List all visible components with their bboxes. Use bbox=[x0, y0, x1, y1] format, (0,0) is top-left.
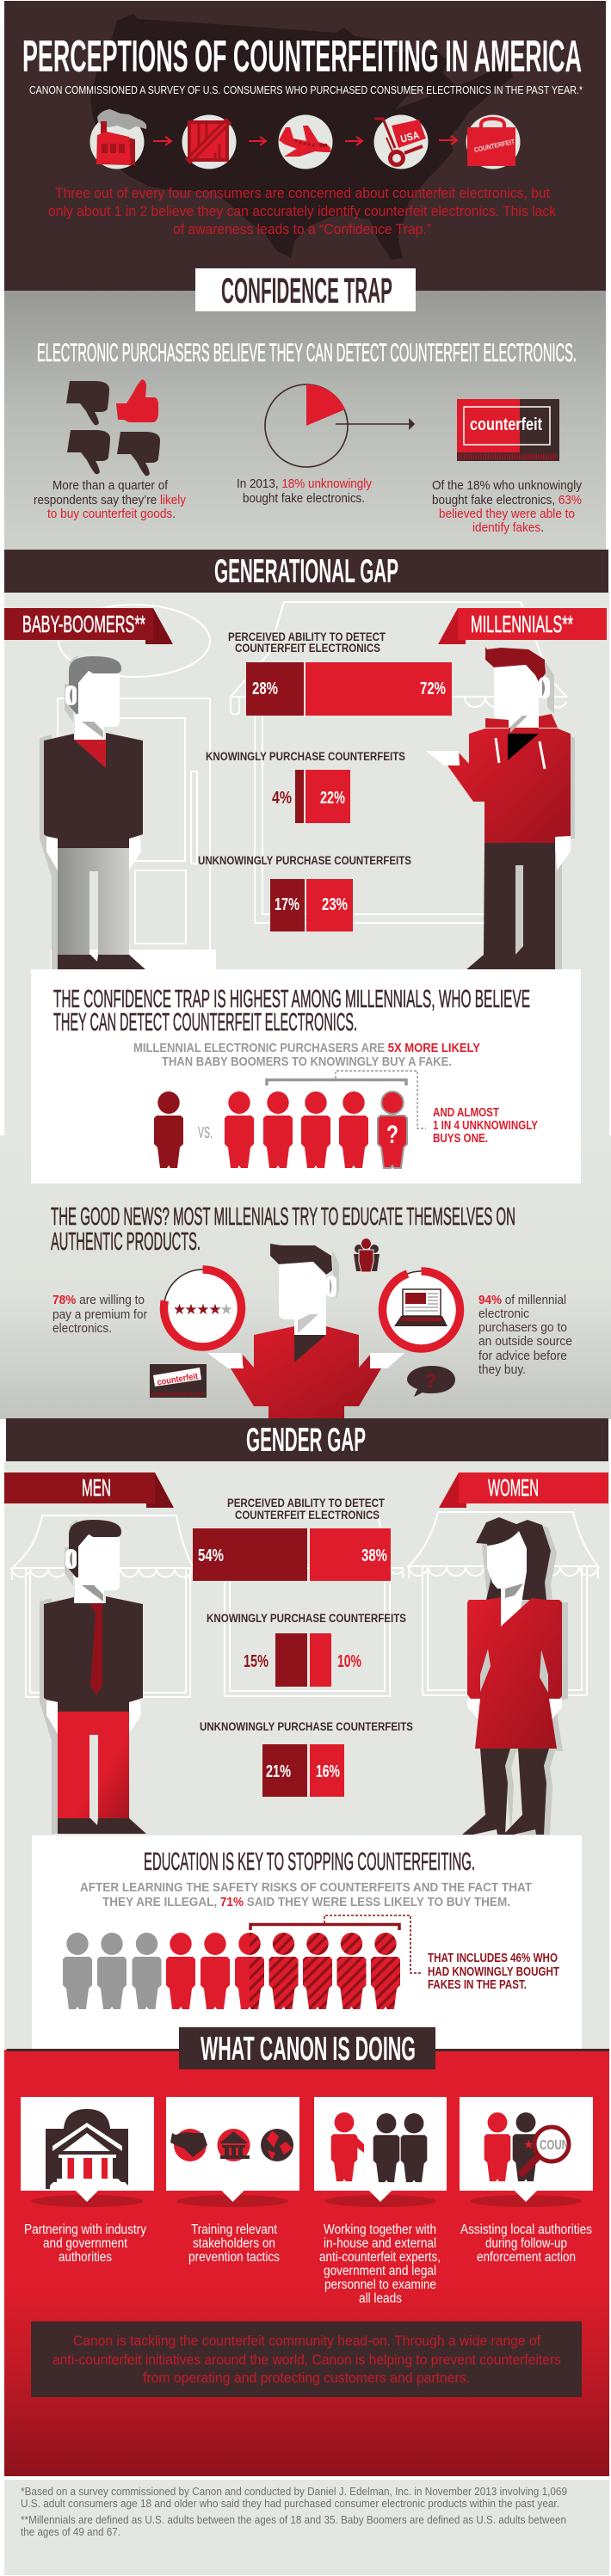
figure: man bbox=[40, 1519, 146, 1834]
badge: what canon is doing bbox=[179, 2027, 435, 2069]
text: 94% advice: for advice before bbox=[478, 1349, 567, 1363]
arrow bbox=[249, 137, 266, 145]
text: 78% premium: pay a premium for bbox=[52, 1307, 147, 1322]
panel: what canon is doing bbox=[4, 2049, 609, 2476]
ribbon: women bbox=[439, 1472, 608, 1508]
lake notch bbox=[395, 86, 430, 109]
figure: woman bbox=[462, 1517, 568, 1835]
figure: baby boomer bbox=[40, 655, 146, 970]
text: card 2: stakeholders on bbox=[193, 2236, 275, 2251]
ribbon: men: MEN bbox=[82, 1474, 111, 1501]
text: 63% believed: bought fake electronics, 63% bbox=[432, 493, 582, 507]
text: 94% advice: purchasers go to bbox=[478, 1320, 567, 1335]
callout: canon statement: Canon is tackling the counterfeit community head-on. Through a wide range of bbox=[73, 2333, 540, 2349]
text: card 2: prevention tactics bbox=[188, 2250, 280, 2265]
arrow bbox=[439, 136, 457, 144]
icon: group of people bbox=[354, 1239, 380, 1272]
bracket and dotted leader bbox=[250, 1915, 421, 1973]
text: 63% believed bbox=[432, 478, 582, 535]
text: card 3: personnel to examine bbox=[324, 2278, 436, 2292]
intro paragraph: Three out of every four consumers are concerned about counterfeit electronics, but bbox=[55, 185, 550, 201]
stat: unknowingly purchase: UNKNOWINGLY PURCHASE COUNTERFEITS bbox=[198, 854, 411, 867]
icon: building disc bbox=[217, 2129, 250, 2161]
ribbon: men bbox=[4, 1472, 174, 1508]
icon: three people bbox=[331, 2112, 427, 2182]
footer notes: *Based on a survey commissioned by Canon and conducted by Daniel J. Edelman, Inc. in November 2013 involving 1,069 bbox=[21, 2486, 567, 2498]
icon: counterfeit card bbox=[457, 399, 559, 461]
subheading: THAN BABY BOOMERS TO KNOWINGLY BUY A FAKE. bbox=[162, 1055, 452, 1069]
stat: unknowingly purchase: 17% bbox=[275, 895, 299, 914]
stat: gender knowingly purchase: KNOWINGLY PURCHASE COUNTERFEITS bbox=[207, 1612, 406, 1625]
chart: 78% ring with stars: ★ bbox=[196, 1301, 210, 1318]
icon: hand truck with USA box bbox=[373, 115, 429, 169]
text: card 3: in-house and external bbox=[324, 2236, 436, 2251]
footer notes bbox=[4, 2480, 609, 2575]
person icons: 1 versus 5: ? bbox=[386, 1121, 398, 1149]
callout: 46%: THAT INCLUDES 46% WHO bbox=[428, 1952, 558, 1965]
callout: canon statement: from operating and protecting customers and partners. bbox=[143, 2370, 470, 2386]
text: 18% unknowingly: In 2013, 18% unknowingly bbox=[237, 476, 372, 491]
callout: one in four: BUYS ONE. bbox=[433, 1132, 488, 1146]
panel: education bbox=[32, 1835, 582, 2050]
icon: government building bbox=[46, 2109, 128, 2191]
icon: counterfeit tag: counterfeit bbox=[157, 1371, 199, 1387]
panel: gender background bbox=[4, 1461, 609, 2055]
text: 78% premium: electronics. bbox=[52, 1321, 112, 1336]
icon: handshake bbox=[170, 2129, 207, 2161]
badge: what canon is doing: WHAT CANON IS DOING bbox=[201, 2031, 416, 2068]
text: card 4: enforcement action bbox=[477, 2250, 576, 2265]
chart: 78% ring with stars: ★ bbox=[208, 1301, 222, 1318]
bracket and dashed leader bbox=[267, 1071, 426, 1128]
store line art: generational bbox=[58, 602, 566, 969]
text: card 4: during follow-up bbox=[485, 2236, 567, 2251]
confidence trap badge bbox=[195, 268, 416, 311]
intro paragraph: only about 1 in 2 believe they can accurately identify counterfeit electronics. This lack bbox=[48, 203, 556, 219]
subheading bbox=[133, 1042, 480, 1069]
stat: gender perceived ability bbox=[193, 1497, 391, 1581]
text: likely to buy bbox=[34, 478, 186, 521]
subheading: AFTER LEARNING THE SAFETY RISKS OF COUNTERFEITS AND THE FACT THAT bbox=[80, 1881, 532, 1895]
icon: people with magnifying glass: COUN bbox=[540, 2138, 569, 2153]
text: 18% unknowingly: bought fake electronics. bbox=[243, 491, 365, 506]
text: card 3: Working together with bbox=[324, 2222, 436, 2237]
callout: 46%: HAD KNOWINGLY BOUGHT bbox=[428, 1965, 559, 1979]
person icons: 1 versus 5: VS. bbox=[198, 1124, 213, 1141]
pie chart bbox=[265, 384, 348, 467]
icon: counterfeit tag bbox=[150, 1364, 207, 1398]
callout: 46%: FAKES IN THE PAST. bbox=[428, 1978, 527, 1992]
text: likely to buy: More than a quarter of bbox=[52, 478, 169, 493]
chart: 78% ring with stars bbox=[164, 1270, 241, 1347]
heading: the good news bbox=[51, 1203, 515, 1256]
person icons: 10 people bbox=[63, 1933, 400, 2009]
heading: the good news: AUTHENTIC PRODUCTS. bbox=[51, 1228, 201, 1256]
callout: one in four: AND ALMOST bbox=[433, 1106, 499, 1120]
stat: gender knowingly purchase: 10% bbox=[337, 1651, 361, 1671]
heading: generational gap: GENERATIONAL GAP bbox=[214, 553, 398, 590]
subheading bbox=[80, 1881, 532, 1909]
footer notes: U.S. adult consumers age 18 and older who said they had purchased consumer electronic products within the past year. bbox=[21, 2498, 559, 2510]
icon: airplane bbox=[279, 115, 332, 169]
arrow bbox=[345, 137, 362, 145]
chart: 78% ring with stars: ★ bbox=[219, 1301, 233, 1318]
icon: counterfeit bag bbox=[466, 115, 520, 169]
text: 94% advice: they buy. bbox=[478, 1362, 526, 1377]
text: 63% believed: believed they were able to bbox=[439, 507, 575, 521]
confidence trap badge: CONFIDENCE TRAP bbox=[221, 270, 392, 310]
heading: gender gap bbox=[6, 1418, 608, 1461]
chart: 78% ring with stars: ★ bbox=[173, 1301, 186, 1318]
text: card 3: government and legal bbox=[324, 2264, 436, 2278]
stat: knowingly purchase bbox=[206, 750, 405, 823]
panel: news background bbox=[0, 1135, 611, 1419]
icon: crate bbox=[182, 115, 236, 169]
ribbon: baby-boomers: BABY-BOOMERS** bbox=[22, 611, 145, 637]
text: card 2 bbox=[188, 2222, 280, 2265]
footer notes: the ages of 49 and 67. bbox=[21, 2526, 120, 2538]
callout: one in four bbox=[433, 1106, 538, 1146]
text: 94% advice bbox=[478, 1293, 572, 1377]
text: 63% believed: identify fakes. bbox=[472, 520, 544, 535]
card: working together bbox=[314, 2097, 447, 2207]
heading: gender gap: GENDER GAP bbox=[246, 1422, 366, 1459]
store step bbox=[51, 950, 216, 969]
header panel bbox=[4, 1, 606, 291]
icon: people with magnifying glass bbox=[484, 2112, 569, 2181]
stat: gender perceived ability: 54% bbox=[198, 1546, 224, 1565]
figure: educated millennial bbox=[207, 1244, 404, 1419]
chart: 94% ring with laptop bbox=[382, 1271, 460, 1349]
text: card 3 bbox=[319, 2222, 441, 2306]
stat: gender perceived ability: PERCEIVED ABILITY TO DETECT bbox=[227, 1497, 386, 1509]
US map silhouette bbox=[90, 14, 513, 260]
stat: gender knowingly purchase: 15% bbox=[244, 1651, 268, 1671]
arrow bbox=[336, 420, 414, 428]
store line art: gender bbox=[12, 1512, 598, 1697]
text: card 3: anti-counterfeit experts, bbox=[319, 2250, 441, 2265]
subheading: THEY ARE ILLEGAL, 71% SAID THEY WERE LESS LIKELY TO BUY THEM. bbox=[102, 1896, 510, 1909]
stat: knowingly purchase: 22% bbox=[320, 788, 345, 808]
stat: perceived ability: PERCEIVED ABILITY TO DETECT bbox=[228, 630, 386, 643]
arrow bbox=[153, 137, 171, 145]
intro paragraph: of awareness leads to a “Confidence Trap.” bbox=[173, 221, 431, 237]
icon: counterfeit card: counterfeit bbox=[470, 415, 542, 434]
text: card 1: authorities bbox=[59, 2250, 112, 2265]
text: card 2: Training relevant bbox=[191, 2222, 278, 2237]
card: training bbox=[166, 2097, 299, 2207]
callout: canon statement: anti-counterfeit initiatives around the world, Canon is helping to prevent counterfeiters bbox=[52, 2352, 561, 2368]
person icons: 1 versus 5 bbox=[154, 1091, 407, 1168]
text: 94% advice: electronic bbox=[478, 1306, 529, 1321]
icon: counterfeit bag: COUNTERFEIT bbox=[473, 138, 515, 154]
icon: thumbs bbox=[66, 379, 160, 476]
stat: unknowingly purchase: 23% bbox=[322, 895, 348, 914]
callout: one in four: 1 IN 4 UNKNOWINGLY bbox=[433, 1119, 538, 1133]
ribbon: women: WOMEN bbox=[488, 1474, 539, 1501]
intro paragraph bbox=[48, 185, 556, 237]
card: assisting bbox=[460, 2097, 593, 2207]
heading: generational gap bbox=[4, 550, 608, 593]
panel: confidence trap among millennials bbox=[31, 969, 581, 1183]
icon: hand truck with USA box: USA bbox=[399, 129, 421, 145]
text: 94% advice: 94% of millennial bbox=[478, 1293, 566, 1307]
panel: confidence trap bbox=[4, 291, 606, 550]
text: 18% unknowingly bbox=[237, 476, 372, 506]
panel: generational background bbox=[4, 593, 609, 1139]
text: card 4: Assisting local authorities bbox=[460, 2222, 592, 2237]
text: card 1: Partnering with industry bbox=[24, 2222, 146, 2237]
card: partnering bbox=[21, 2097, 154, 2207]
stat: gender perceived ability: 38% bbox=[361, 1546, 387, 1565]
stat: knowingly purchase: KNOWINGLY PURCHASE COUNTERFEITS bbox=[206, 750, 405, 763]
stat: gender unknowingly purchase: 16% bbox=[316, 1761, 340, 1781]
ribbon: millennials bbox=[438, 608, 607, 644]
callout: 46% bbox=[428, 1952, 559, 1992]
icon: people with magnifying glass: ★ bbox=[523, 2137, 534, 2151]
stat: gender perceived ability: COUNTERFEIT ELECTRONICS bbox=[235, 1509, 380, 1522]
stat: gender unknowingly purchase bbox=[200, 1720, 413, 1797]
icon: question bubble bbox=[407, 1366, 455, 1397]
stat: perceived ability: COUNTERFEIT ELECTRONICS bbox=[235, 642, 380, 655]
icon: factory bbox=[89, 109, 146, 169]
icon: question bubble: ? bbox=[425, 1370, 436, 1392]
chart: 78% ring with stars: ★ bbox=[184, 1301, 198, 1318]
figure: millennial bbox=[426, 647, 575, 970]
text: 94% advice: an outside source bbox=[478, 1334, 572, 1349]
stat: unknowingly purchase bbox=[198, 854, 411, 931]
icon: globe bbox=[261, 2129, 293, 2161]
stat: perceived ability: 72% bbox=[420, 679, 446, 698]
text: 78% premium: 78% are willing to bbox=[52, 1293, 145, 1307]
text: likely to buy: respondents say they’re likely bbox=[34, 493, 186, 507]
stat: gender unknowingly purchase: 21% bbox=[266, 1761, 291, 1781]
callout: canon statement bbox=[31, 2321, 582, 2397]
ribbon: baby-boomers bbox=[4, 608, 173, 644]
text: 78% premium bbox=[52, 1293, 147, 1336]
stat: perceived ability bbox=[228, 630, 452, 716]
heading bbox=[53, 986, 530, 1036]
stat: perceived ability: 28% bbox=[252, 679, 278, 698]
stat: gender unknowingly purchase: UNKNOWINGLY PURCHASE COUNTERFEITS bbox=[200, 1720, 413, 1733]
stat: knowingly purchase: 4% bbox=[272, 788, 292, 808]
stat: gender knowingly purchase bbox=[207, 1612, 406, 1687]
text: likely to buy: to buy counterfeit goods. bbox=[47, 507, 176, 521]
text: card 4 bbox=[460, 2222, 592, 2265]
text: card 1: and government bbox=[43, 2236, 128, 2251]
text: card 1 bbox=[24, 2222, 146, 2265]
footer notes: **Millennials are defined as U.S. adults between the ages of 18 and 35. Baby Boomers are defined as U.S. adults between bbox=[21, 2514, 566, 2526]
subheading: MILLENNIAL ELECTRONIC PURCHASERS ARE 5X MORE LIKELY bbox=[133, 1042, 480, 1055]
text: 63% believed: Of the 18% who unknowingly bbox=[432, 478, 582, 493]
text: card 3: all leads bbox=[359, 2291, 402, 2306]
